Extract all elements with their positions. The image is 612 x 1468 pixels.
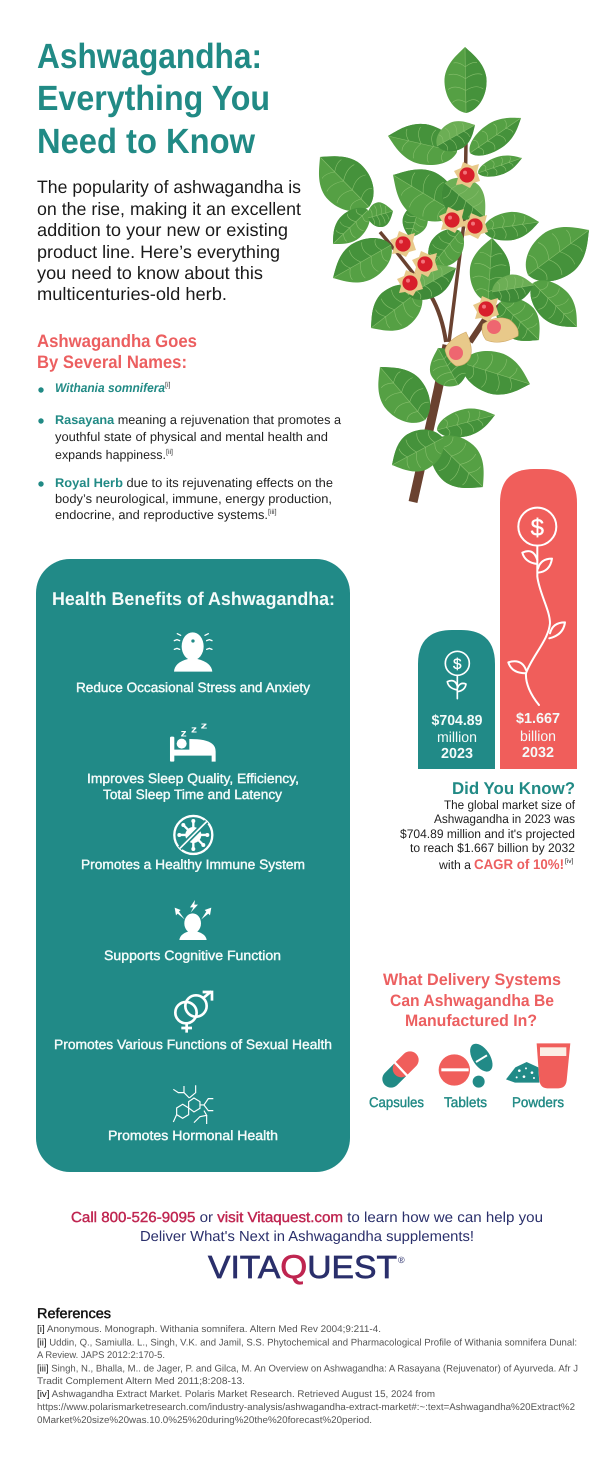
callout: did you know: $704.89 million and it's projected [400, 827, 575, 841]
references: [iii] Singh, N., Bhalla, M.. de Jager, P. and Gilca, M. An Overview on Ashwagandha: A Rasayana (Rejuvenator) of Ayurveda. Afr J [37, 1364, 578, 1374]
intro text block: addition to your new or existing [37, 220, 288, 240]
callout: did you know [400, 779, 576, 872]
list of names: [iii] [268, 508, 277, 516]
list of names: Withania somnifera [55, 381, 165, 395]
references: Tradit Complement Altern Med 2011;8:208-13. [37, 1376, 245, 1387]
call to action: Call 800-526-9095 or visit Vitaquest.com to learn how we can help you [71, 1210, 543, 1226]
label: sleep: Total Sleep Time and Latency [103, 787, 282, 802]
heading: delivery systems [383, 971, 561, 1030]
icon: sleeping in bed: z [201, 720, 207, 731]
icon: hormone molecule [173, 1085, 213, 1124]
callout: did you know: The global market size of [444, 798, 576, 812]
illustration: ashwagandha plant [303, 47, 603, 504]
bar: 2032: $ [531, 514, 544, 541]
intro text block: The popularity of ashwagandha is [37, 177, 301, 197]
list of names: endocrine, and reproductive systems. [55, 508, 268, 522]
label: sleep: Improves Sleep Quality, Efficiency, [87, 771, 299, 786]
list of names [38, 381, 341, 522]
heading: several names: By Several Names: [37, 352, 187, 372]
label: sleep [87, 771, 299, 802]
title: Everything You [37, 79, 270, 118]
label: stress: Reduce Occasional Stress and Anxiety [76, 680, 310, 695]
references: [i] Anonymous. Monograph. Withania somnifera. Altern Med Rev 2004;9:211-4. [37, 1324, 381, 1335]
bar: 2032: 2032 [522, 745, 554, 761]
logo: Vitaquest: ® [398, 1255, 405, 1265]
heading: delivery systems: Can Ashwagandha Be [390, 992, 554, 1010]
bar: 2023: million [437, 730, 477, 746]
label: hormonal: Promotes Hormonal Health [108, 1128, 278, 1143]
call to action: Deliver What's Next in Ashwagandha supplements! [140, 1229, 474, 1245]
bar: 2032 [500, 469, 577, 769]
callout: did you know: to reach $1.667 billion by 2032 [410, 841, 575, 855]
references [37, 1305, 578, 1426]
list of names: body’s neurological, immune, energy production, [55, 492, 332, 506]
label: capsules: Capsules [369, 1094, 424, 1110]
heading: several names [37, 331, 197, 372]
list of names: [ii] [166, 448, 173, 456]
intro text block: you need to know about this [37, 263, 263, 283]
references: A Review. JAPS 2012:2:170-5. [37, 1350, 165, 1361]
list of names: Royal Herb due to its rejuvenating effects on the [55, 476, 333, 490]
plant stems [380, 140, 512, 502]
callout: did you know: [iv] [565, 858, 574, 865]
icon: head with lightning [175, 900, 211, 940]
intro text block: product line. Here’s everything [37, 242, 280, 262]
list of names: Rasayana meaning a rejuvenation that promotes a [55, 413, 341, 427]
title: Need to Know [37, 122, 256, 161]
icon: tablets [439, 1040, 497, 1088]
label: sexual health: Promotes Various Functions of Sexual Health [54, 1037, 332, 1052]
references: 0Market%20size%20was.10.0%25%20during%20the%20forecast%20period. [37, 1415, 372, 1426]
callout: did you know: Did You Know? [452, 779, 575, 798]
icon: sleeping in bed: z [191, 724, 197, 735]
list of names: [i] [165, 381, 170, 389]
bar: 2023: 2023 [441, 746, 473, 762]
bar: 2023: $ [453, 655, 462, 672]
panel heading: Health Benefits of Ashwagandha: [52, 588, 335, 609]
icon: stressed head [174, 632, 212, 672]
call to action [71, 1210, 543, 1245]
references: References [37, 1305, 111, 1321]
references: [ii] Uddin, Q., Samiulla. L., Singh, V.K. and Jamil, S.S. Phytochemical and Pharmacological Profile of Withania somnifera Dunal: [37, 1338, 577, 1348]
label: cognitive: Supports Cognitive Function [104, 948, 281, 963]
list of names: youthful state of physical and mental health and [55, 430, 328, 444]
icon: capsule [391, 1060, 410, 1079]
callout: did you know: CAGR of 10%! [474, 856, 564, 872]
title: Ashwagandha: [37, 37, 262, 76]
plant leaves [303, 47, 603, 504]
icon: sleeping in bed: z [181, 727, 187, 739]
icon: powder and glass [506, 1043, 570, 1088]
heading: delivery systems: Manufactured In? [405, 1012, 537, 1030]
list of names: expands happiness. [55, 448, 166, 462]
logo: Vitaquest: VITAQUEST [208, 1248, 397, 1285]
intro text block: on the rise, making it an excellent [37, 199, 301, 219]
intro text block [37, 177, 301, 304]
icon: crossed-out virus [174, 816, 212, 854]
icon: gender symbols [175, 991, 212, 1033]
icon: sleeping in bed [170, 720, 216, 762]
panel: health benefits [36, 559, 350, 1172]
bar: 2032: $1.667 [516, 711, 560, 727]
intro text block: multicenturies-old herb. [37, 284, 227, 304]
references: [iv] Ashwagandha Extract Market. Polaris Market Research. Retrieved August 15, 2024 from [37, 1389, 435, 1400]
bar: 2023 [418, 630, 495, 769]
heading: delivery systems: What Delivery Systems [383, 971, 561, 989]
callout: did you know: with a [438, 858, 471, 872]
label: powders: Powders [512, 1094, 564, 1110]
plant berries [390, 162, 518, 366]
bar: 2032: billion [520, 729, 556, 745]
title [37, 37, 270, 161]
chart: market size bars [418, 469, 577, 769]
label: immune: Promotes a Healthy Immune System [81, 857, 305, 872]
heading: several names: Ashwagandha Goes [37, 331, 197, 351]
references: https://www.polarismarketresearch.com/industry-analysis/ashwagandha-extract-market#:~:text=Ashwagandha%20Extract%2 [37, 1402, 575, 1413]
bar: 2023: $704.89 [432, 713, 482, 729]
callout: did you know: Ashwagandha in 2023 was [434, 812, 575, 826]
label: tablets: Tablets [444, 1094, 487, 1110]
